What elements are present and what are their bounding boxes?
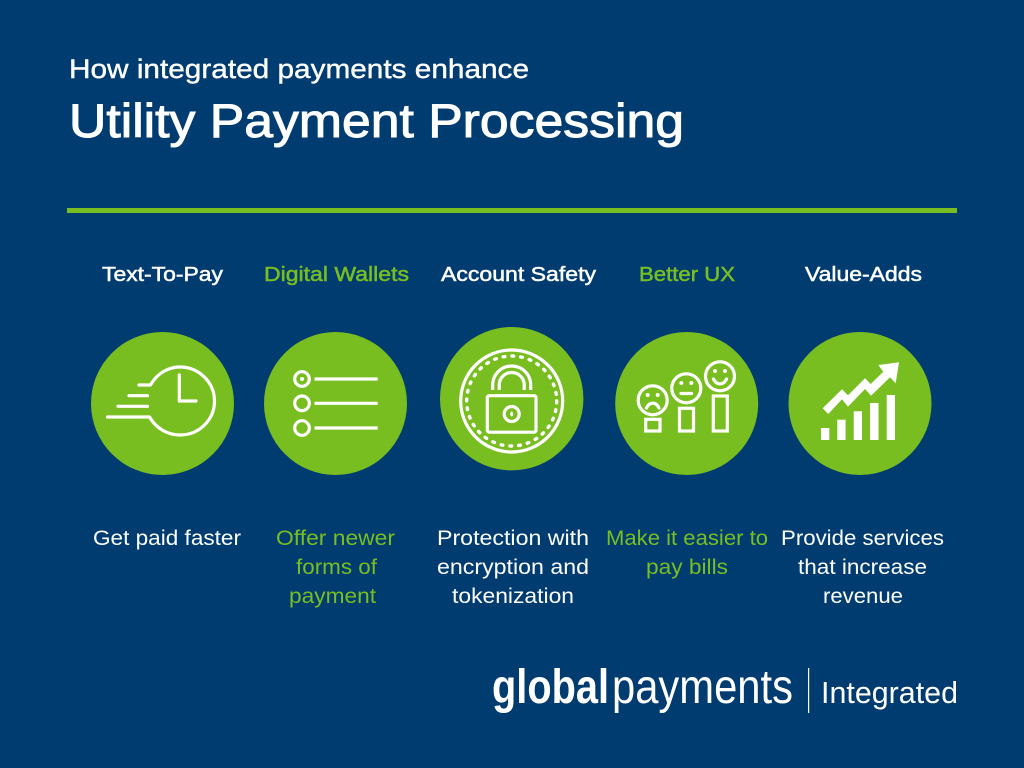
green divider [67,208,957,213]
logo: Global Payments Integrated: payments [612,661,793,714]
text: Make it easier to pay bills: Make it easier to [606,526,768,550]
heading: Digital Wallets: Digital Wallets [264,263,409,286]
text: Offer newer forms of payment: payment [289,584,376,608]
text: Provide services that increase revenue: revenue [823,584,903,608]
icon: padlock coin [440,327,583,470]
title: Utility Payment Processing [69,94,684,147]
column: Text-To-Pay [91,263,241,550]
text: Provide services that increase revenue: that increase [798,555,927,579]
icon: satisfaction faces and bars [615,332,758,475]
logo: Global Payments Integrated: global [492,661,609,714]
column: Digital Wallets [264,263,409,608]
text: Offer newer forms of payment [276,526,395,608]
logo: Global Payments Integrated [492,661,958,714]
subtitle: How integrated payments enhance [69,54,529,84]
icon: rising bar chart with arrow [788,332,932,475]
text: Offer newer forms of payment: Offer newer [276,526,395,550]
text: Get paid faster: Get paid faster [93,526,241,550]
column: Value-Adds [781,263,944,608]
logo: Global Payments Integrated: Integrated [821,675,958,710]
icon: option list [264,332,407,475]
text: Provide services that increase revenue [781,526,944,608]
text: Offer newer forms of payment: forms of [296,555,377,579]
heading: Text-To-Pay: Text-To-Pay [102,263,224,286]
text: Make it easier to pay bills: pay bills [646,555,728,579]
text: Protection with encryption and tokenization: Protection with [437,526,589,550]
heading: Better UX: Better UX [639,263,735,286]
text: Protection with encryption and tokenization: encryption and [437,555,589,579]
icon: speeding clock [91,332,234,475]
heading: Account Safety: Account Safety [441,263,597,286]
text: Make it easier to pay bills [606,526,768,579]
text: Protection with encryption and tokenization: tokenization [452,584,574,608]
column: Better UX [606,263,768,579]
column: Account Safety [437,263,597,608]
text: Provide services that increase revenue: Provide services [781,526,944,550]
heading: Value-Adds: Value-Adds [805,263,922,286]
text: Protection with encryption and tokenization [437,526,589,608]
